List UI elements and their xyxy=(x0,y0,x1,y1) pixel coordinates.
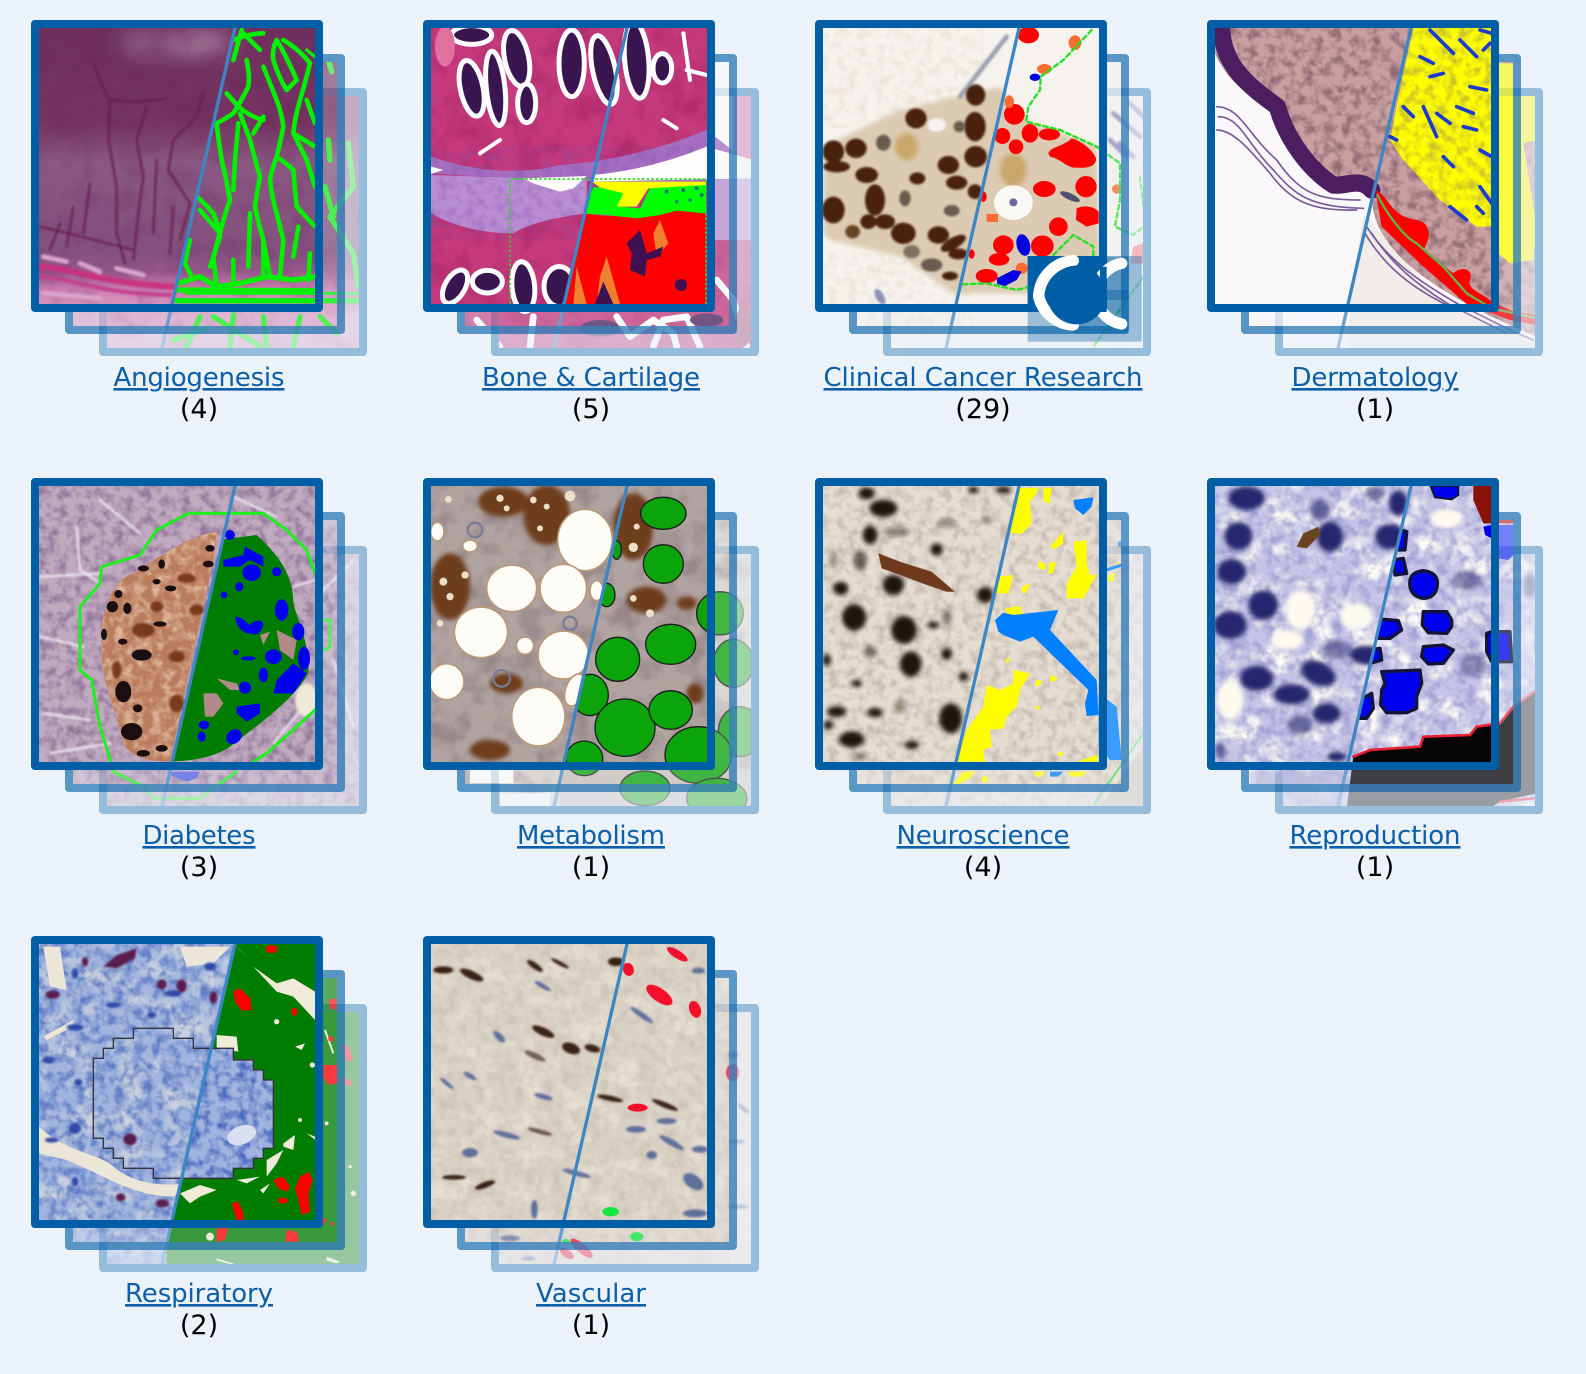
label: Angiogenesis: Angiogenesis xyxy=(114,363,284,393)
label: Respiratory: Respiratory xyxy=(125,1279,273,1309)
stacked images: Neuroscience xyxy=(815,478,1155,813)
card: Bone & Cartilage xyxy=(423,20,767,425)
card: Metabolism xyxy=(423,478,763,883)
label: Bone & Cartilage: Bone & Cartilage xyxy=(482,363,700,393)
stacked images: Dermatology xyxy=(1207,20,1547,355)
count: Dermatology: (1) xyxy=(1356,394,1394,425)
label: Clinical Cancer Research: Clinical Cancer Research xyxy=(824,363,1142,393)
icon: corner logo xyxy=(1028,256,1142,342)
stacked images: Clinical Cancer Research xyxy=(815,20,1155,355)
count: Vascular: (1) xyxy=(572,1310,610,1341)
card: Dermatology xyxy=(1207,20,1547,425)
stacked images: Metabolism xyxy=(423,478,763,818)
stacked images: Angiogenesis xyxy=(31,20,371,355)
label: Metabolism: Metabolism xyxy=(517,821,665,851)
stacked images: Reproduction xyxy=(1207,478,1547,813)
count: Respiratory: (2) xyxy=(180,1310,218,1341)
label: Neuroscience: Neuroscience xyxy=(896,821,1070,851)
card: Angiogenesis xyxy=(31,20,371,425)
count: Angiogenesis: (4) xyxy=(180,394,218,425)
label: Vascular: Vascular xyxy=(536,1279,646,1309)
card: Respiratory xyxy=(31,936,371,1341)
count: Diabetes: (3) xyxy=(180,852,218,883)
count: Bone & Cartilage: (5) xyxy=(572,394,610,425)
stacked images: Vascular xyxy=(423,936,763,1271)
card: Clinical Cancer Research xyxy=(815,20,1155,425)
count: Neuroscience: (4) xyxy=(964,852,1002,883)
label: Diabetes: Diabetes xyxy=(142,821,256,851)
card: Neuroscience xyxy=(815,478,1155,883)
card: Diabetes xyxy=(31,478,371,883)
stacked images: Bone & Cartilage xyxy=(423,20,767,355)
card: Reproduction xyxy=(1207,478,1547,883)
count: Clinical Cancer Research: (29) xyxy=(955,394,1011,425)
stacked images: Respiratory xyxy=(31,936,371,1271)
label: Dermatology: Dermatology xyxy=(1292,363,1458,393)
stacked images: Diabetes xyxy=(31,478,371,813)
count: Reproduction: (1) xyxy=(1356,852,1394,883)
label: Reproduction: Reproduction xyxy=(1290,821,1460,851)
count: Metabolism: (1) xyxy=(572,852,610,883)
card: Vascular xyxy=(423,936,763,1341)
